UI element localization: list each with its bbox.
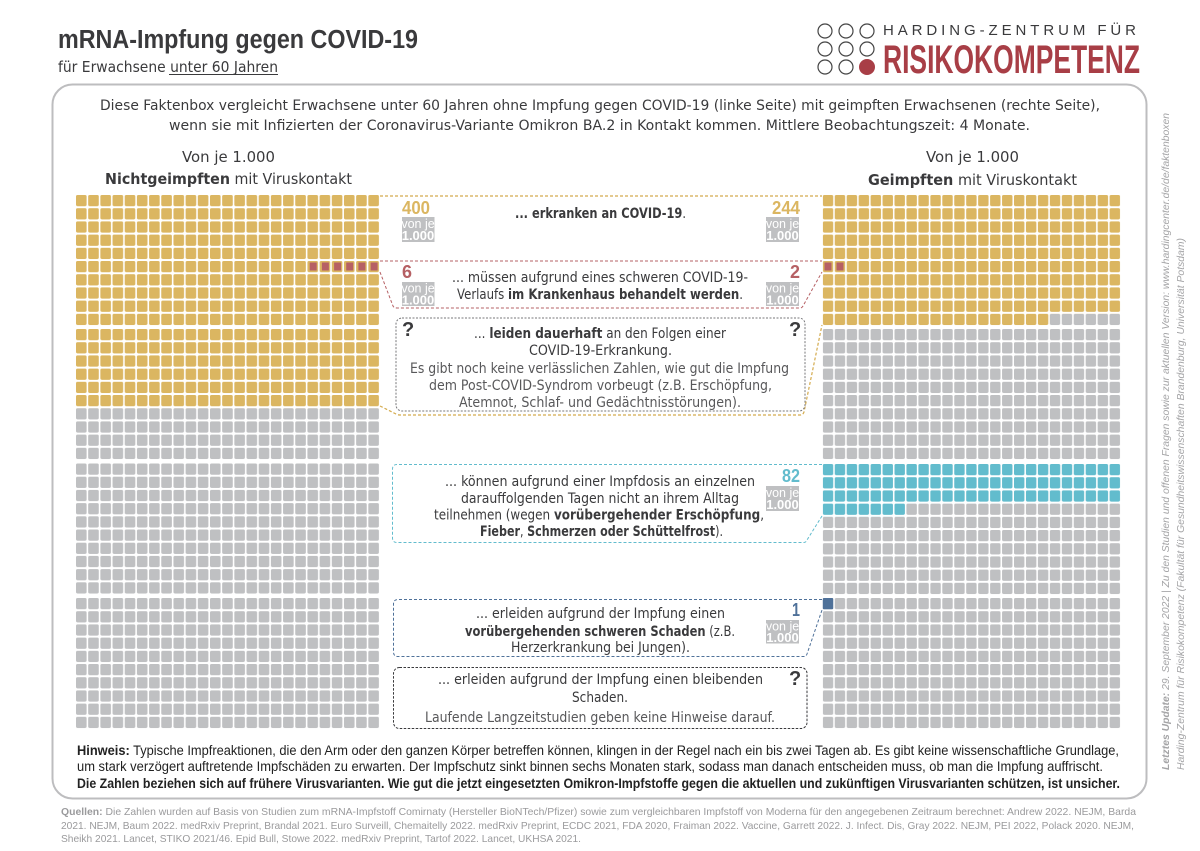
row: hospitalised: von je <box>401 282 435 296</box>
blue cell: 1 temporary serious harm <box>823 598 833 609</box>
side note: update date and affiliation <box>1160 113 1187 770</box>
row: permanent harm, no data: Schaden. <box>572 690 628 706</box>
row: hospitalised: 1.000 <box>402 292 434 308</box>
row: fall ill with COVID-19: 1.000 <box>766 228 799 243</box>
row: temporary serious harm: 1 <box>792 600 800 620</box>
heading: unvaccinated column: Von je 1.000 <box>182 148 275 166</box>
row: temporary serious harm: vorübergehenden schweren Schaden (z.B. <box>465 624 735 640</box>
row: vaccine side effects: 1.000 <box>766 497 799 512</box>
row: hospitalised: 6 <box>402 262 412 282</box>
row: hospitalised: 1.000 <box>766 292 799 308</box>
row: vaccine side effects <box>392 464 822 542</box>
row: permanent harm, no data: ? <box>789 668 801 690</box>
row: long COVID, no reliable numbers: COVID-19-Erkrankung. <box>529 343 672 359</box>
row: fall ill with COVID-19: von je <box>401 217 435 231</box>
side note: update date and affiliation: Letztes Update: 29. September 2022 | Zu den Studien und offenen Fragen sowie zur aktuellen Version: www.hardingcenter.de/de/faktenboxen <box>1160 113 1172 770</box>
row: permanent harm, no data <box>394 668 807 728</box>
sources: Quellen: Die Zahlen wurden auf Basis von Studien zum mRNA-Impfstoff Comirnaty (Hersteller BioNTech/Pfizer) sowie zum vergleichbaren Impfstoff von Moderna für den angegebenen Zeitraum berechnet: Andrew 2022. NEJM, Barda <box>61 806 1136 818</box>
row: temporary serious harm: von je <box>766 620 799 634</box>
sources: 2021. NEJM, Baum 2022. medRxiv Preprint, Brandal 2021. Euro Surveill, Chemaitelly 2022. medRxiv Preprint, ECDC 2021, FDA 2020, Fraiman 2022. Vaccine, Garrett 2022. J. Infect. Dis, Gray 2022. NEJM, PEI 2022, Polack 2020. NEJM, <box>61 820 1134 832</box>
heading: vaccinated column <box>868 148 1077 189</box>
logo: Harding-Zentrum für Risikokompetenz: HARDING-ZENTRUM FÜR <box>883 21 1136 39</box>
row: fall ill with COVID-19 <box>380 196 822 243</box>
heading: vaccinated column: Geimpften mit Viruskontakt <box>868 171 1077 189</box>
row: fall ill with COVID-19: 400 <box>402 198 430 218</box>
side note: update date and affiliation: Harding-Zentrum für Risikokompetenz (Fakultät für Gesundheitswissenschaften Brandenburg, Universität Potsdam) <box>1175 238 1187 770</box>
note: Hinweis: um stark verzögert auftretende Impfschäden zu erwarten. Der Impfschutz sinkt binnen sechs Monaten stark, sodass man danach entscheiden muss, ob man die Impfung auffrischt. <box>77 759 1103 774</box>
row: long COVID, no reliable numbers <box>380 318 822 415</box>
row: hospitalised: ... müssen aufgrund eines schweren COVID-19- <box>452 270 748 286</box>
row: vaccine side effects: ... können aufgrund einer Impfdosis an einzelnen <box>445 474 755 490</box>
row: long COVID, no reliable numbers: dem Post-COVID-Syndrom vorbeugt (z.B. Erschöpfung, <box>429 378 772 394</box>
row: long COVID, no reliable numbers: ? <box>402 319 414 341</box>
intro text <box>100 98 1100 134</box>
note: Hinweis: Hinweis: Typische Impfreaktionen, die den Arm oder den ganzen Körper betreffen können, klingen in der Regel nach ein bis zwei Tagen ab. Es gibt keine wissenschaftliche Grundlage, <box>77 743 1119 758</box>
sources: Sheikh 2021. Lancet, STIKO 2021/46. Epid Bull, Stowe 2022. medRxiv Preprint, Tartof 2022. Lancet, UKHSA 2021. <box>61 833 581 845</box>
row: long COVID, no reliable numbers: Es gibt noch keine verlässlichen Zahlen, wie gut die Impfung <box>410 361 789 377</box>
row: temporary serious harm <box>394 600 822 656</box>
red cells: 2 hospitalised vaccinated <box>824 262 844 270</box>
row: fall ill with COVID-19: ... erkranken an COVID-19. <box>515 206 686 222</box>
chart: icon grid of 1000 unvaccinated people <box>76 195 380 730</box>
title: mRNA-Impfung gegen COVID-19 <box>58 26 418 54</box>
row: vaccine side effects: 82 <box>782 466 800 486</box>
red cells: 6 hospitalised unvaccinated <box>310 262 378 270</box>
sources <box>61 806 1136 845</box>
row: vaccine side effects: teilnehmen (wegen vorübergehender Erschöpfung, <box>434 508 764 524</box>
row: hospitalised: von je <box>766 282 799 296</box>
row: permanent harm, no data: Laufende Langzeitstudien geben keine Hinweise darauf. <box>425 710 775 726</box>
panel: fact box frame <box>52 84 1146 798</box>
intro text: wenn sie mit Infizierten der Coronavirus-Variante Omikron BA.2 in Kontakt kommen. Mittlere Beobachtungszeit: 4 Monate. <box>169 118 1030 134</box>
chart: icon grid of 1000 vaccinated people <box>823 195 1121 730</box>
row: vaccine side effects: Fieber, Schmerzen oder Schüttelfrost). <box>480 524 723 540</box>
row: hospitalised <box>380 261 822 308</box>
heading: vaccinated column: Von je 1.000 <box>926 148 1019 166</box>
row: temporary serious harm: Herzerkrankung bei Jungen). <box>511 640 690 656</box>
row: fall ill with COVID-19: 1.000 <box>402 228 434 243</box>
row: temporary serious harm: ... erleiden aufgrund der Impfung einen <box>476 606 725 622</box>
row: temporary serious harm: 1.000 <box>766 630 799 645</box>
row: hospitalised: Verlaufs im Krankenhaus behandelt werden. <box>457 287 743 303</box>
row: long COVID, no reliable numbers: ? <box>789 319 801 341</box>
row: fall ill with COVID-19: 244 <box>772 198 800 218</box>
row: long COVID, no reliable numbers: Atemnot, Schlaf- und Gedächtnisstörungen). <box>459 395 741 411</box>
row: hospitalised: 2 <box>790 262 800 282</box>
row: vaccine side effects: von je <box>766 486 799 500</box>
subtitle: für Erwachsene unter 60 Jahren <box>58 58 278 76</box>
row: fall ill with COVID-19: von je <box>766 217 799 231</box>
note: Hinweis: Die Zahlen beziehen sich auf frühere Virusvarianten. Wie gut die jetzt eingesetzten Omikron-Impfstoffe gegen die aktuellen und zukünftigen Virusvarianten schützen, ist unsicher. <box>77 776 1120 791</box>
heading: unvaccinated column <box>105 148 352 188</box>
row: long COVID, no reliable numbers: ... leiden dauerhaft an den Folgen einer <box>474 326 726 342</box>
row: permanent harm, no data: ... erleiden aufgrund der Impfung einen bleibenden <box>438 672 763 688</box>
row: vaccine side effects: darauffolgenden Tagen nicht an ihrem Alltag <box>461 491 739 507</box>
heading: unvaccinated column: Nichtgeimpften mit Viruskontakt <box>105 170 352 188</box>
note: Hinweis <box>77 743 1120 791</box>
logo: Harding-Zentrum für Risikokompetenz <box>818 21 1140 82</box>
intro text: Diese Faktenbox vergleicht Erwachsene unter 60 Jahren ohne Impfung gegen COVID-19 (linke Seite) mit geimpften Erwachsenen (rechte Seite), <box>100 98 1100 114</box>
